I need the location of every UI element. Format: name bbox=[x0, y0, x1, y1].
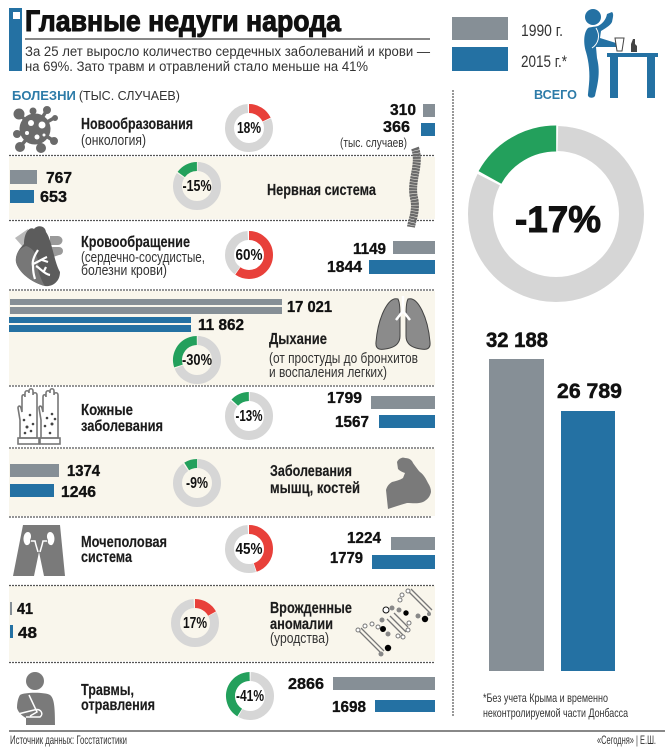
label: Мочеполовая bbox=[81, 534, 167, 551]
donut -41%: -41% bbox=[236, 688, 264, 705]
bars: 1698 bbox=[332, 699, 366, 716]
label: система bbox=[81, 549, 132, 566]
label: мышц, костей bbox=[270, 480, 360, 497]
bars: 41 bbox=[17, 601, 33, 618]
icon: lungs bbox=[376, 296, 430, 349]
donut -41% bbox=[223, 669, 277, 723]
bars: 1844 bbox=[327, 259, 362, 276]
donut -13% bbox=[221, 388, 277, 444]
bars: 653 bbox=[40, 189, 67, 206]
intro text: За 25 лет выросло количество сердечных заболеваний и крови — bbox=[25, 44, 430, 59]
bars: 1224 bbox=[347, 530, 381, 547]
label: Дыхание bbox=[269, 331, 327, 348]
label: аномалии bbox=[270, 616, 333, 633]
bars bbox=[9, 299, 332, 334]
bars: 48 bbox=[18, 625, 37, 642]
section heading: БОЛЕЗНИ(ТЫС. СЛУЧАЕВ) bbox=[12, 88, 180, 103]
label bbox=[269, 331, 418, 381]
source: Источник данных: Госстатистики bbox=[10, 733, 127, 747]
label: Кожные bbox=[81, 402, 133, 419]
bars bbox=[327, 390, 435, 431]
icon: kidneys bbox=[13, 525, 65, 576]
label: (от простуды до бронхитов bbox=[269, 351, 418, 367]
bars: 2866 bbox=[288, 676, 324, 693]
label bbox=[270, 463, 360, 497]
bars: 767 bbox=[46, 170, 72, 187]
row: skin bbox=[18, 388, 435, 444]
label: Врожденные bbox=[270, 600, 352, 617]
label: Нервная система bbox=[267, 182, 376, 199]
label: и воспаления легких) bbox=[269, 365, 387, 381]
label bbox=[81, 116, 193, 149]
row: circulation bbox=[15, 226, 435, 286]
label: Травмы, bbox=[81, 682, 134, 699]
big donut -17% bbox=[453, 111, 659, 317]
bars: (тыс. случаев) bbox=[340, 135, 407, 150]
label bbox=[270, 600, 352, 647]
donut 60%: 60% bbox=[236, 247, 262, 264]
donut -9% bbox=[170, 456, 224, 510]
donut 60% bbox=[230, 236, 268, 274]
donut -15%: -15% bbox=[183, 178, 211, 195]
label bbox=[81, 234, 205, 279]
label: болезни крови) bbox=[81, 263, 167, 279]
legend: 1990 г. bbox=[521, 21, 563, 40]
icon: person drinking at table bbox=[584, 9, 658, 98]
icon: gloves bbox=[18, 389, 60, 444]
label: Новообразования bbox=[81, 116, 193, 133]
donut -30% bbox=[172, 335, 222, 385]
title: Главные недуги народа bbox=[25, 5, 341, 38]
label: Заболевания bbox=[270, 463, 352, 480]
bars: 310 bbox=[390, 102, 416, 119]
heading: total: ВСЕГО bbox=[534, 88, 577, 102]
row: muscles bbox=[10, 456, 431, 510]
donut 18% bbox=[230, 108, 268, 148]
row: injuries bbox=[17, 669, 435, 725]
footnote: *Без учета Крыма и временно bbox=[483, 691, 608, 705]
bars bbox=[330, 530, 435, 569]
bars bbox=[10, 601, 37, 642]
bars bbox=[10, 463, 100, 501]
donut 17%: 17% bbox=[183, 615, 207, 632]
bars bbox=[10, 170, 72, 206]
header block bbox=[9, 5, 430, 74]
big donut -17%: -17% bbox=[515, 199, 601, 240]
bars: 1567 bbox=[335, 414, 369, 431]
title marker bbox=[9, 8, 22, 71]
bars bbox=[340, 102, 435, 150]
icon: heart bbox=[15, 226, 63, 286]
footnote bbox=[483, 691, 628, 720]
icon: DNA bbox=[356, 589, 432, 656]
bars: 1246 bbox=[61, 484, 96, 501]
label: (уродства) bbox=[270, 631, 329, 647]
row: congenital bbox=[10, 589, 432, 656]
label bbox=[81, 534, 167, 566]
row: neoplasms bbox=[14, 102, 435, 152]
label: (онкология) bbox=[81, 133, 146, 149]
donut 18%: 18% bbox=[237, 120, 261, 137]
icon: virus bbox=[14, 106, 58, 152]
bars bbox=[288, 676, 435, 716]
icon: arm sling bbox=[17, 672, 55, 725]
icon: spine bbox=[411, 148, 417, 227]
intro text: на 69%. Зато травм и отравлений стало меньше на 41% bbox=[25, 59, 368, 74]
total bar chart: 32 188 bbox=[486, 329, 548, 352]
bars: 1799 bbox=[327, 390, 362, 407]
bars: 1374 bbox=[67, 463, 100, 480]
label bbox=[81, 682, 155, 714]
donut 17% bbox=[176, 604, 214, 642]
donut -13%: -13% bbox=[235, 408, 263, 425]
row: respiration bbox=[9, 296, 430, 385]
bars: 17 021 bbox=[287, 299, 332, 316]
label bbox=[81, 402, 163, 435]
label: заболевания bbox=[81, 418, 163, 435]
bars: 1149 bbox=[353, 241, 386, 258]
donut -9%: -9% bbox=[186, 475, 208, 492]
donut -30%: -30% bbox=[182, 352, 212, 369]
bars: 1779 bbox=[330, 550, 363, 567]
row: nervous system bbox=[10, 148, 417, 227]
label: Кровообращение bbox=[81, 234, 190, 251]
legend: 2015 г.* bbox=[521, 52, 567, 71]
bars: 366 bbox=[383, 119, 410, 136]
intro text bbox=[25, 44, 430, 74]
bars bbox=[327, 241, 435, 276]
label: (сердечно-сосудистые, bbox=[81, 250, 205, 266]
label: отравления bbox=[81, 697, 155, 714]
total bar chart bbox=[486, 329, 622, 671]
total bar chart: 26 789 bbox=[557, 380, 622, 403]
bars: 11 862 bbox=[198, 317, 244, 334]
legend bbox=[452, 17, 567, 71]
donut 45% bbox=[230, 530, 268, 568]
row: urogenital bbox=[13, 525, 435, 576]
donut -15% bbox=[170, 159, 224, 213]
icon: muscle bbox=[386, 458, 431, 509]
donut 45%: 45% bbox=[236, 541, 262, 558]
